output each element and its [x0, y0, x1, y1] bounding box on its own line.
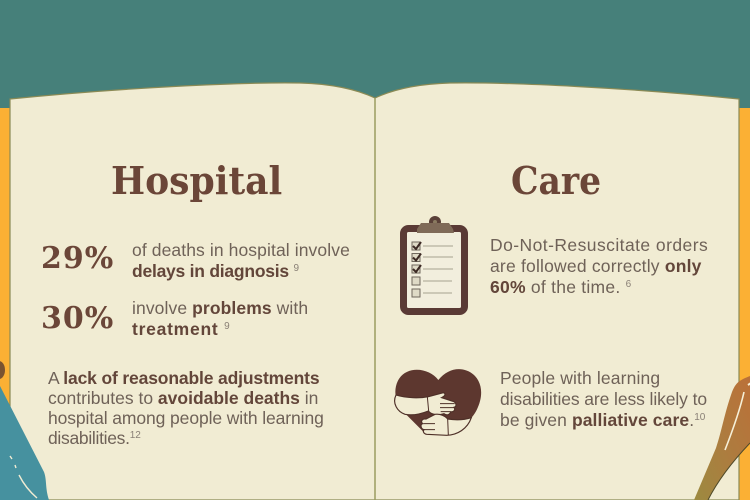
icon: heart hug [394, 369, 482, 436]
icon: clipboard [400, 216, 468, 315]
text: palliative care: disabilities are less likely to [500, 389, 707, 409]
text: delays in diagnosis: of deaths in hospital involve [132, 240, 350, 260]
text: palliative care [500, 368, 707, 430]
text: reasonable adjustments: contributes to avoidable deaths in [48, 388, 318, 408]
text: palliative care: People with learning [500, 368, 660, 388]
text: palliative care: be given palliative care.10 [500, 410, 705, 430]
icon: left pencil [0, 361, 49, 500]
text: problems with treatment: treatment 9 [132, 319, 230, 339]
text: reasonable adjustments: A lack of reasonable adjustments [48, 368, 319, 388]
text: reasonable adjustments: hospital among people with learning [48, 408, 324, 428]
heading: Care: Care [511, 158, 601, 203]
text: do-not-resuscitate: are followed correctly only [490, 256, 702, 276]
text: problems with treatment: involve problems with [132, 298, 308, 318]
stat: 30%: 30% [41, 301, 114, 336]
stat: 29%: 29% [41, 241, 114, 276]
text: problems with treatment [132, 298, 308, 339]
text: delays in diagnosis [132, 240, 350, 281]
text: delays in diagnosis: delays in diagnosis 9 [132, 261, 299, 281]
text: do-not-resuscitate: Do-Not-Resuscitate orders [490, 235, 708, 255]
text: reasonable adjustments [48, 368, 324, 448]
text: do-not-resuscitate [490, 235, 708, 297]
icon: right pencil [694, 376, 750, 500]
text: reasonable adjustments: disabilities.12 [48, 428, 141, 448]
text: do-not-resuscitate: 60% of the time. 6 [490, 277, 631, 297]
heading: Hospital: Hospital [111, 158, 282, 203]
